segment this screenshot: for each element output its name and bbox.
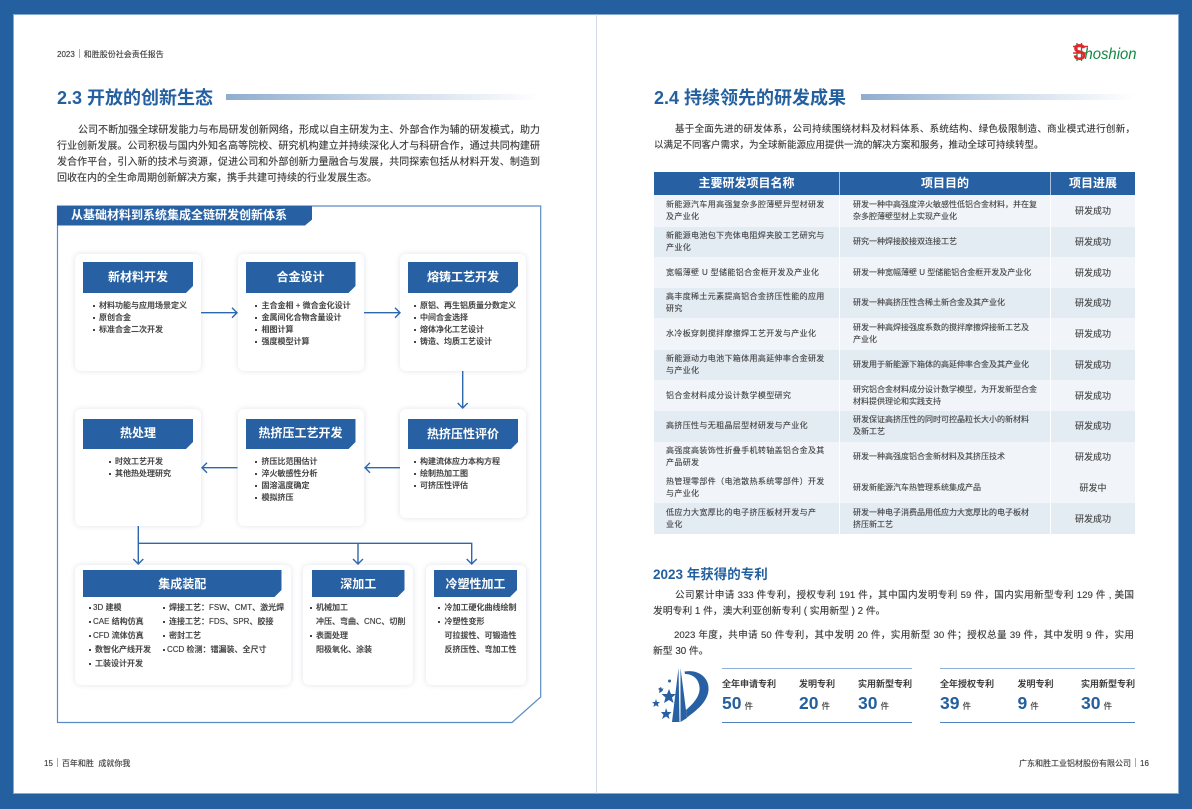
card: 新材料开发: 材料功能与应用场景定义 bbox=[99, 301, 187, 310]
row 7: 研究铝合金材料成分设计数学模型，为开发新型合金 bbox=[853, 384, 1037, 394]
card: 熔铸工艺开发: 熔体净化工艺设计 bbox=[420, 325, 484, 334]
row 11: 业化 bbox=[666, 520, 683, 528]
stats group: applications bbox=[722, 668, 912, 723]
panel: right page bbox=[596, 14, 1179, 794]
footer right: 广东和胜工业铝材股份有限公司 16 bbox=[1019, 759, 1149, 768]
card: 新材料开发: 原创合金 bbox=[99, 313, 131, 322]
logo: shoshion: S bbox=[1073, 39, 1086, 65]
card: 热挤压性评价: 热挤压性评价 bbox=[427, 426, 499, 440]
text block: intro: 发合作平台，引入新的技术与资源，促进公司和外部创新力量融合与发展，共同探索包括从材料开发、制造到 bbox=[57, 157, 540, 168]
card: 合金设计: 相图计算 bbox=[262, 325, 294, 334]
card: 热处理: 热处理 bbox=[120, 426, 156, 440]
table header: 项目进展 bbox=[1069, 176, 1117, 190]
card: 冷塑性加工: 冷加工硬化曲线绘制 bbox=[444, 603, 516, 612]
card: 合金设计: 强度模型计算 bbox=[262, 337, 310, 346]
row 4 bbox=[654, 288, 1135, 318]
card: 深加工: 深加工 bbox=[340, 577, 376, 591]
row 5: 研发一种高焊接强度系数的搅拌摩擦焊接新工艺及 bbox=[853, 323, 1029, 332]
card: 熔铸工艺开发 bbox=[400, 254, 526, 371]
row 8: 研发成功 bbox=[1075, 421, 1111, 431]
row 4: 高丰度稀土元素提高铝合金挤压性能的应用 bbox=[666, 292, 825, 301]
row 5: 产业化 bbox=[853, 335, 877, 344]
text block: R&D intro bbox=[654, 124, 1135, 151]
row 1 bbox=[654, 195, 1135, 227]
card: 深加工 bbox=[303, 565, 413, 685]
card: 合金设计: 主合金相 + 微合金化设计 bbox=[262, 301, 351, 310]
heading: 2.3: 2.3 开放的创新生态 bbox=[57, 88, 213, 108]
card: 深加工: 冲压、弯曲、CNC、切削 bbox=[316, 617, 405, 626]
row 2: 研发成功 bbox=[1075, 237, 1111, 247]
row 8: 研发保证高挤压性的同时可控晶粒长大小的新材料 bbox=[853, 415, 1029, 424]
card: 集成装配 bbox=[75, 565, 290, 685]
row 2: 新能源电池包下壳体电阻焊夹胶工艺研究与 bbox=[666, 231, 825, 240]
text block: patents: 发明专利 1 件，澳大利亚创新专利 ( 实用新型 ) 2 件。 bbox=[653, 606, 885, 617]
card: 集成装配: CCD 检测：镭漏装、全尺寸 bbox=[167, 645, 267, 654]
logo: shoshion: hoshion bbox=[1084, 46, 1136, 63]
diagram title tab: 从基础材料到系统集成全链研发创新体系 bbox=[71, 208, 287, 222]
stat: 30 bbox=[858, 678, 912, 713]
card: 熔铸工艺开发: 原铝、再生铝质量分数定义 bbox=[420, 301, 516, 310]
text block: R&D intro: 以满足不同客户需求，为全球新能源应用提供一流的解决方案和服务，推动全球可持续转型。 bbox=[654, 140, 1044, 151]
row 9 bbox=[654, 442, 1135, 472]
row 1: 研发成功 bbox=[1075, 206, 1111, 216]
stat: 30: 实用新型专利 bbox=[858, 679, 912, 689]
card: 热挤压工艺开发: 淬火敏感性分析 bbox=[262, 469, 318, 478]
text block: patents: 新型 30 件。 bbox=[653, 646, 709, 657]
stat: 9 bbox=[1018, 678, 1054, 713]
row 5 bbox=[654, 318, 1135, 350]
card: 新材料开发 bbox=[75, 254, 201, 371]
row 7: 铝合金材料成分设计数学模型研究 bbox=[666, 390, 791, 400]
card: 冷塑性加工 bbox=[426, 565, 526, 685]
text block: patents: 2023 年度，共申请 50 件专利，其中发明 20 件，实用新型 30 件；授权总量 39 件，其中发明 9 件，实用 bbox=[674, 630, 1134, 641]
row 3 bbox=[654, 257, 1135, 288]
running header: 2023 和胜股份社会责任报告 bbox=[57, 50, 164, 59]
row 4: 研发成功 bbox=[1075, 298, 1111, 308]
card: 冷塑性加工: 可拉拔性、可锻造性 bbox=[444, 631, 516, 640]
text block: patents bbox=[653, 590, 1134, 657]
card: 深加工: 表面处理 bbox=[316, 631, 348, 640]
row 11: 研发一种电子消费品用低应力大宽厚比的电子板材 bbox=[853, 508, 1029, 516]
text block: intro: 行业创新发展。公司积极与国内外知名高等院校、研究机构建立并持续深化人才与科研合作，通过共同构建研 bbox=[57, 141, 540, 152]
text block: R&D intro: 基于全面先进的研发体系，公司持续围绕材料及材料体系、系统结构、绿色极限制造、商业模式进行创新， bbox=[675, 124, 1135, 135]
card: 熔铸工艺开发: 中间合金选择 bbox=[420, 313, 468, 322]
row 8: 高挤压性与无粗晶层型材研发与产业化 bbox=[666, 421, 808, 430]
row 5: 研发成功 bbox=[1075, 329, 1111, 339]
card: 热挤压性评价: 绘制热加工图 bbox=[420, 469, 468, 478]
card: 集成装配: 焊接工艺：FSW、CMT、激光焊 bbox=[169, 603, 284, 612]
row 4: 研发一种高挤压性含稀土新合金及其产业化 bbox=[853, 298, 1005, 307]
text block: patents: 公司累计申请 333 件专利，授权专利 191 件，其中国内发明专利 59 件，国内实用新型专利 129 件 , 美国 bbox=[675, 590, 1134, 601]
card: 新材料开发: 标准合金二次开发 bbox=[99, 325, 163, 334]
stat: 39: 39 件 bbox=[940, 693, 971, 713]
card: 热挤压工艺开发 bbox=[238, 409, 364, 526]
stat: 20 bbox=[799, 678, 835, 713]
row 9: 产品研发 bbox=[666, 458, 699, 467]
card: 深加工: 阳极氧化、涂装 bbox=[316, 645, 372, 654]
row 10: 研发新能源汽车热管理系统集成产品 bbox=[853, 482, 981, 492]
card: 合金设计: 金属间化合物含量设计 bbox=[262, 313, 342, 322]
row 1: 杂多腔薄壁型材上实现产业化 bbox=[853, 212, 957, 221]
row 2: 研究一种焊接胶接双连接工艺 bbox=[853, 237, 957, 246]
table: R&D projects bbox=[654, 172, 1135, 195]
row 1: 及产业化 bbox=[666, 212, 699, 221]
card: 集成装配: 连接工艺：FDS、SPR、胶接 bbox=[169, 617, 273, 626]
card: 冷塑性加工: 冷塑性变形 bbox=[444, 617, 484, 626]
row 6 bbox=[654, 350, 1135, 380]
card: 深加工: 机械加工 bbox=[316, 603, 348, 612]
row 8: 及新工艺 bbox=[853, 427, 885, 436]
row 11: 挤压新工艺 bbox=[853, 520, 893, 528]
stat: 20: 20 件 bbox=[799, 693, 830, 713]
row 5: 水冷板穿刺搅拌摩擦焊工艺开发与产业化 bbox=[666, 329, 816, 338]
stat: 50: 全年申请专利 bbox=[722, 679, 776, 689]
stat: 30 bbox=[1081, 678, 1135, 713]
row 7 bbox=[654, 380, 1135, 411]
card: 热处理 bbox=[75, 409, 201, 526]
row 1: 新能源汽车用高强复杂多腔薄壁异型材研发 bbox=[666, 200, 825, 209]
text block: intro bbox=[57, 124, 540, 184]
stat: 50: 50 件 bbox=[722, 693, 753, 713]
card: 热挤压工艺开发: 模拟挤压 bbox=[262, 493, 294, 502]
panel: left page bbox=[13, 14, 596, 794]
table header: 主要研发项目名称 bbox=[698, 176, 794, 190]
card: 热处理: 其他热处理研究 bbox=[115, 469, 171, 478]
card: 集成装配: CAE 结构仿真 bbox=[93, 617, 144, 626]
card: 热挤压性评价: 构建流体应力本构方程 bbox=[420, 457, 500, 466]
card: 集成装配: 密封工艺 bbox=[169, 631, 201, 640]
card: 集成装配: 3D 建模 bbox=[93, 603, 121, 612]
card: 热挤压工艺开发: 固溶温度确定 bbox=[262, 481, 310, 490]
stat: 50 bbox=[722, 678, 776, 713]
row 2: 产业化 bbox=[666, 243, 691, 252]
stat: 39 bbox=[940, 678, 994, 713]
stat: 9: 9 件 bbox=[1018, 693, 1039, 713]
stats group: grants bbox=[940, 668, 1135, 723]
row 4: 研究 bbox=[666, 304, 683, 313]
row 7: 研发成功 bbox=[1075, 390, 1111, 400]
card: 热挤压性评价 bbox=[400, 409, 526, 518]
row 1: 研发一种中高强度淬火敏感性低铝合金材料，并在复 bbox=[853, 200, 1037, 209]
card: 新材料开发: 新材料开发 bbox=[108, 270, 168, 284]
card: 熔铸工艺开发: 铸造、均质工艺设计 bbox=[420, 337, 492, 346]
footer left: 15 百年和胜 成就你我 bbox=[44, 759, 130, 768]
heading rule bbox=[861, 94, 1135, 100]
diagram title tab bbox=[57, 206, 312, 226]
row 10: 研发中 bbox=[1079, 482, 1106, 492]
row 10: 与产业化 bbox=[666, 488, 699, 498]
row 11: 低应力大宽厚比的电子挤压板材开发与产 bbox=[666, 508, 816, 516]
stat: 30: 30 件 bbox=[1081, 693, 1112, 713]
heading: 2.4: 2.4 持续领先的研发成果 bbox=[654, 88, 846, 108]
row 6: 研发用于新能源下箱体的高延伸率合金及其产业化 bbox=[853, 360, 1029, 369]
card: 热挤压工艺开发: 热挤压工艺开发 bbox=[258, 426, 342, 440]
row 8 bbox=[654, 411, 1135, 442]
text block: intro: 公司不断加强全球研发能力与布局研发创新网络，形成以自主研发为主、外部合作为辅的研发模式，助力 bbox=[78, 125, 540, 136]
row 2 bbox=[654, 227, 1135, 257]
card: 集成装配: 集成装配 bbox=[158, 577, 206, 591]
row 6: 研发成功 bbox=[1075, 360, 1111, 370]
card: 集成装配: 工装设计开发 bbox=[95, 659, 143, 668]
card: 冷塑性加工: 反挤压性、弯加工性 bbox=[444, 645, 516, 654]
card: 热挤压性评价: 可挤压性评估 bbox=[420, 481, 468, 490]
card: 冷塑性加工: 冷塑性加工 bbox=[445, 577, 506, 591]
card: 集成装配: CFD 流体仿真 bbox=[93, 631, 144, 640]
card: 合金设计 bbox=[238, 254, 364, 371]
row 10 bbox=[654, 472, 1135, 503]
row 11 bbox=[654, 503, 1135, 534]
row 10: 热管理零部件（电池散热系统零部件）开发 bbox=[666, 476, 825, 486]
stat: 39: 全年授权专利 bbox=[940, 679, 994, 689]
text block: intro: 回收在内的全生命周期创新解决方案，携手共建可持续的行业发展生态。 bbox=[57, 173, 377, 184]
row 7: 材料提供理论和实践支持 bbox=[853, 396, 941, 406]
row 9: 高强度高装饰性折叠手机转轴盖铝合金及其 bbox=[666, 446, 825, 455]
table header: 项目目的 bbox=[921, 176, 969, 190]
card: 热挤压工艺开发: 挤压比范围估计 bbox=[262, 457, 318, 466]
row 11: 研发成功 bbox=[1075, 514, 1111, 524]
stat: 30: 30 件 bbox=[858, 693, 889, 713]
card: 集成装配: 数智化产线开发 bbox=[95, 645, 151, 654]
card: 熔铸工艺开发: 熔铸工艺开发 bbox=[427, 270, 499, 284]
logo: shoshion bbox=[1073, 39, 1136, 65]
icon: patent emblem bbox=[652, 668, 708, 722]
table header bbox=[654, 172, 1135, 195]
card: 合金设计: 合金设计 bbox=[276, 270, 324, 284]
row 9: 研发成功 bbox=[1075, 452, 1111, 462]
stat: 30: 实用新型专利 bbox=[1081, 679, 1135, 689]
heading rule bbox=[226, 94, 540, 100]
row 3: 宽幅薄壁 U 型储能铝合金框开发及产业化 bbox=[666, 268, 819, 276]
row 6: 与产业化 bbox=[666, 366, 699, 375]
row 3: 研发成功 bbox=[1075, 268, 1111, 278]
heading: patents: 2023 年获得的专利 bbox=[653, 567, 768, 582]
row 3: 研发一种宽幅薄壁 U 型储能铝合金框开发及产业化 bbox=[853, 268, 1031, 276]
stat: 9: 发明专利 bbox=[1018, 679, 1054, 689]
row 6: 新能源动力电池下箱体用高延伸率合金研发 bbox=[666, 354, 825, 363]
stat: 20: 发明专利 bbox=[799, 679, 835, 689]
row 9: 研发一种高强度铝合金新材料及其挤压技术 bbox=[853, 452, 1005, 461]
card: 热处理: 时效工艺开发 bbox=[115, 457, 163, 466]
